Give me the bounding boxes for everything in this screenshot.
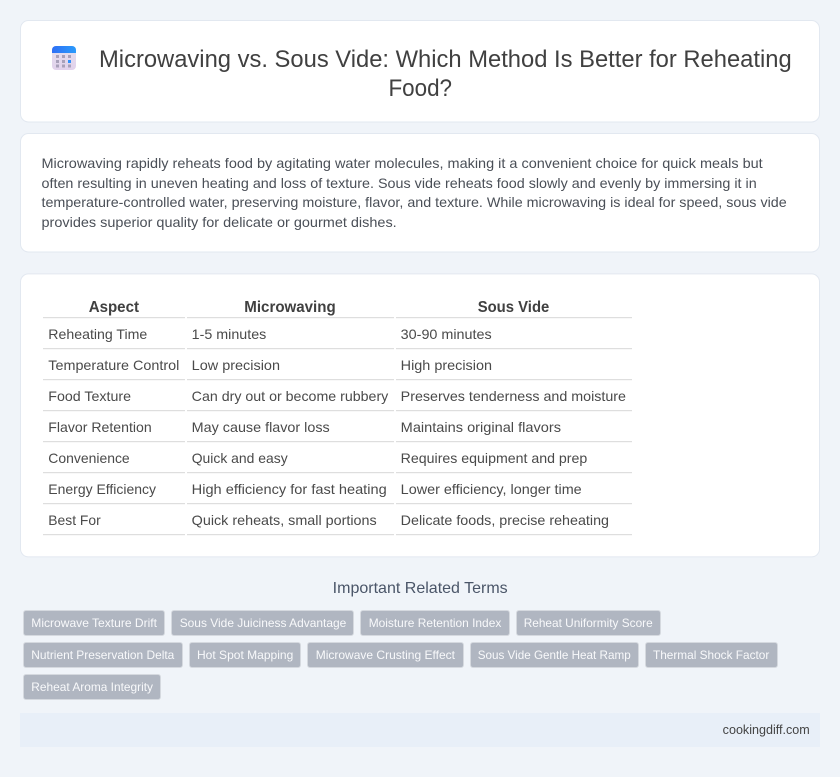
tag: Reheat Aroma Integrity: [31, 680, 153, 694]
heading: [99, 46, 792, 102]
row: temperature control: [48, 357, 492, 373]
panel: summary paragraph: temperature-controlled water, preserving moisture, flavor, and texture. While microwaving is ideal for speed, sous vide: [42, 194, 787, 210]
tag: Microwave Crusting Effect: [316, 648, 456, 662]
tag: [516, 610, 660, 636]
row: convenience: [48, 450, 588, 466]
row: reheating time: 30-90 minutes: [401, 326, 492, 342]
row: energy efficiency: [48, 481, 582, 497]
row: reheating time: 1-5 minutes: [192, 326, 266, 342]
panel: summary paragraph: Microwaving rapidly reheats food by agitating water molecules, making it a convenient choice for quick meals but: [42, 155, 763, 171]
panel: summary paragraph: often resulting in uneven heating and loss of texture. Sous vide reheats food slowly and evenly by immersing it in: [42, 175, 757, 191]
row: food texture: [48, 388, 626, 404]
row: food texture: Preserves tenderness and moisture: [401, 388, 626, 404]
heading: Microwaving vs. Sous Vide: Which Method Is Better for Reheating: [99, 46, 792, 73]
tag: [308, 642, 464, 668]
table header: Sous Vide: [478, 299, 550, 316]
row: flavor retention: Flavor Retention: [48, 419, 152, 435]
tag: [646, 642, 778, 668]
row: food texture: Can dry out or become rubbery: [192, 388, 388, 404]
row: reheating time: [48, 326, 492, 342]
tag: Moisture Retention Index: [369, 616, 501, 630]
row: flavor retention: [48, 419, 561, 435]
row: best for: [48, 512, 609, 528]
table header: [89, 299, 550, 316]
footer: cookingdiff.com: [723, 723, 810, 737]
panel: comparison table: [20, 274, 820, 557]
tag: [24, 674, 160, 700]
tag: Microwave Texture Drift: [31, 616, 158, 630]
tag: Nutrient Preservation Delta: [31, 648, 175, 662]
tag: Thermal Shock Factor: [653, 648, 769, 662]
row: best for: Best For: [48, 512, 101, 528]
tag: Hot Spot Mapping: [197, 648, 293, 662]
icon: calendar: [52, 46, 76, 70]
tag: Reheat Uniformity Score: [524, 616, 653, 630]
related terms tags: [24, 610, 778, 700]
tag: [190, 642, 300, 668]
related terms heading: Important Related Terms: [333, 580, 508, 597]
row: convenience: Quick and easy: [192, 450, 288, 466]
row: convenience: Convenience: [48, 450, 130, 466]
row: flavor retention: May cause flavor loss: [192, 419, 330, 435]
tag: [24, 642, 182, 668]
row: energy efficiency: High efficiency for fast heating: [192, 481, 387, 497]
tag: [470, 642, 638, 668]
row: energy efficiency: Energy Efficiency: [48, 481, 156, 497]
row: temperature control: Temperature Control: [48, 357, 179, 373]
row: temperature control: High precision: [401, 357, 492, 373]
tag: [24, 610, 164, 636]
panel: summary paragraph: [20, 134, 820, 252]
row: temperature control: Low precision: [192, 357, 280, 373]
row: flavor retention: Maintains original flavors: [401, 419, 561, 435]
table header: Aspect: [89, 299, 139, 316]
tag: [172, 610, 354, 636]
row: best for: Delicate foods, precise reheating: [401, 512, 609, 528]
heading: Food?: [388, 75, 452, 102]
row: best for: Quick reheats, small portions: [192, 512, 377, 528]
row: energy efficiency: Lower efficiency, longer time: [401, 481, 582, 497]
tag: Sous Vide Juiciness Advantage: [180, 616, 347, 630]
panel: summary paragraph: provides superior quality for delicate or gourmet dishes.: [42, 214, 397, 230]
row: food texture: Food Texture: [48, 388, 131, 404]
panel: title: [20, 20, 820, 122]
footer: [20, 713, 820, 747]
row: reheating time: Reheating Time: [48, 326, 148, 342]
tag: [360, 610, 510, 636]
row: convenience: Requires equipment and prep: [401, 450, 588, 466]
table header: Microwaving: [244, 299, 336, 316]
tag: Sous Vide Gentle Heat Ramp: [478, 648, 631, 662]
